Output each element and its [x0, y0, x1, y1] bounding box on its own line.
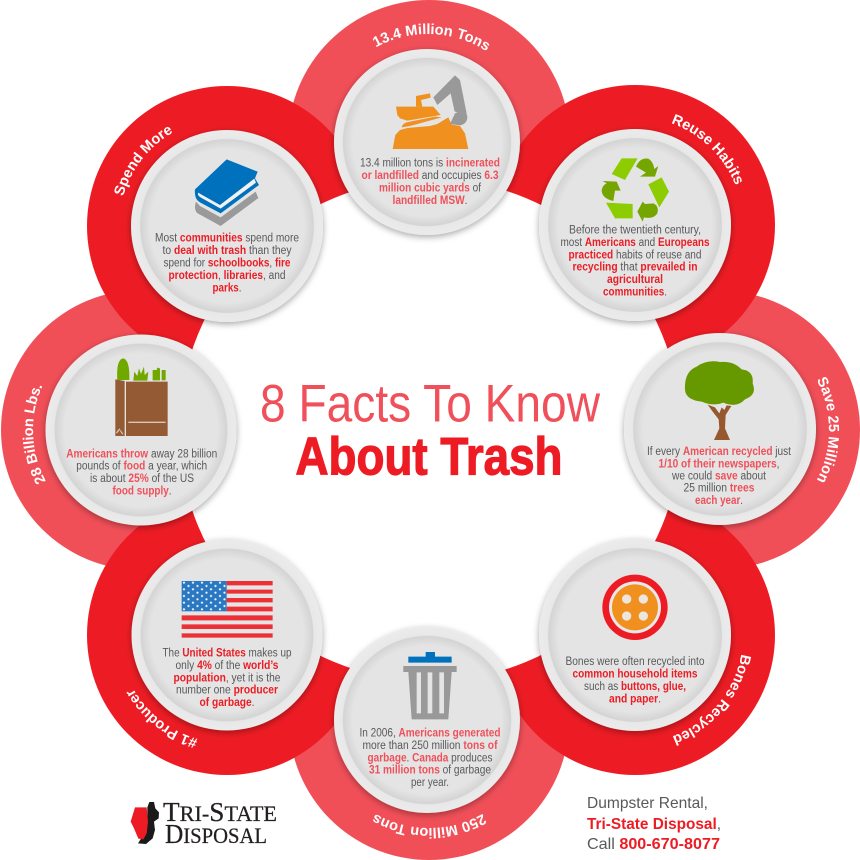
text block: is about 25% of the US [90, 473, 194, 485]
text block: and paper. [609, 693, 661, 705]
label: Save 25 Million: Save 25 Million [817, 377, 840, 482]
icon: grocery bag [115, 358, 168, 436]
text block: to deal with trash than they [162, 245, 292, 257]
panel: pink band 28 Billion Lbs [1, 290, 281, 570]
text block: population, yet it is the [174, 672, 280, 684]
label: Spend More: Spend More [114, 127, 172, 196]
title: About Trash [296, 427, 562, 486]
text block: food supply. [112, 485, 172, 497]
text block: agricultural [607, 274, 663, 286]
label: 13.4 Million Tons: 13.4 Million Tons [372, 23, 490, 50]
panel: red band Reuse Habits [495, 85, 775, 365]
text block: more than 250 million tons of [362, 740, 498, 752]
title: 8 Facts To Know [260, 375, 601, 434]
text block: parks. [212, 282, 242, 294]
icon: tree [685, 361, 754, 440]
panel: pink band 250 Million Tons [289, 580, 569, 860]
text block: million cubic yards of [379, 182, 482, 194]
text block: practiced habits of reuse and [568, 249, 702, 261]
text block: communities. [603, 287, 667, 299]
panel: #1 Producer [126, 537, 326, 748]
text block [162, 648, 292, 709]
text block: Bones were often recycled into [566, 656, 704, 668]
label: 250 Million Tons: 250 Million Tons [373, 814, 486, 839]
text block: most Americans and Europeans [560, 237, 710, 249]
text block: each year. [695, 495, 743, 507]
text block: 25 million trees [684, 483, 754, 495]
text block: landfilled MSW. [392, 195, 468, 207]
text block [360, 158, 500, 207]
icon: US flag [182, 581, 273, 638]
icon: books [195, 159, 259, 226]
disc [539, 539, 731, 731]
text block: 1/10 of their newspapers, [658, 458, 780, 470]
panel: Save 25 Million [620, 331, 840, 531]
disc [132, 540, 322, 730]
icon: state map [131, 802, 159, 844]
text block: such as buttons, glue, [584, 681, 686, 693]
text block: only 4% of the world’s [176, 660, 278, 672]
text block [647, 446, 792, 507]
contact text: Tri-State Disposal, [587, 816, 721, 833]
panel: red band Bones Recycled [495, 495, 775, 775]
disc [46, 334, 236, 526]
panel: pink band 13.4 Million Tons [288, 0, 570, 282]
icon: button [602, 575, 668, 640]
text block: The United States makes up [162, 648, 292, 660]
text block: of garbage. [200, 697, 254, 709]
panel: red band #1 Producer [87, 495, 367, 775]
text block: common household items [572, 669, 698, 681]
text block: In 2006, Americans generated [360, 728, 500, 740]
label: #1 Producer: #1 Producer [126, 690, 198, 748]
text block: Most communities spend more [155, 233, 299, 245]
text block: garbage. Canada produces [368, 752, 493, 764]
icon: recycling [602, 158, 669, 222]
panel: red band Spend More [87, 86, 367, 366]
text block: per year. [411, 777, 449, 789]
panel: Bones Recycled [534, 536, 752, 746]
panel: pink band Save 25 Million [582, 291, 860, 569]
disc [131, 130, 323, 322]
contact text: Dumpster Rental, [587, 795, 708, 812]
panel: 13.4 Million Tons [330, 23, 524, 241]
text block: Before the twentieth century, [569, 224, 701, 236]
text block [360, 728, 500, 789]
disc [334, 627, 520, 813]
logo: Tri-State Disposal [131, 797, 277, 849]
label: Reuse Habits: Reuse Habits [672, 114, 742, 184]
panel: 28 Billion Lbs [22, 332, 241, 532]
text block: 13.4 million tons is incinerated [360, 158, 500, 170]
text block [155, 233, 299, 294]
title [260, 375, 601, 486]
disc [624, 333, 816, 525]
text block: number one producer [176, 685, 278, 697]
text block: pounds of food a year, which [76, 461, 207, 473]
panel: Spend More [114, 127, 328, 328]
text block: spend for schoolbooks, fire [164, 258, 290, 270]
icon: trash can [403, 652, 457, 719]
central white circle [179, 179, 681, 681]
text block: Americans throw away 28 billion [66, 448, 217, 460]
panel: 250 Million Tons [330, 625, 524, 839]
label: 28 Billion Lbs.: 28 Billion Lbs. [22, 386, 46, 484]
text block [566, 656, 704, 705]
label: Bones Recycled: Bones Recycled [672, 654, 752, 746]
text block: 31 million tons of garbage [369, 765, 491, 777]
disc [334, 49, 520, 235]
panel: Reuse Habits [534, 114, 742, 328]
disc [539, 129, 731, 321]
text block: protection, libraries, and [168, 270, 286, 282]
logo text: TRI-STATE [163, 797, 277, 827]
text block: recycling that prevailed in [572, 262, 698, 274]
text block [66, 448, 217, 497]
text block: or landfilled and occupies 6.3 [362, 170, 498, 182]
logo text [163, 797, 277, 849]
text block [560, 224, 710, 299]
logo text: DISPOSAL [165, 819, 267, 849]
contact text [587, 795, 721, 853]
text block: we could save about [671, 470, 767, 482]
text block: If every American recycled just [647, 446, 792, 458]
icon: excavator [393, 75, 468, 149]
contact text: Call 800-670-8077 [587, 836, 720, 853]
